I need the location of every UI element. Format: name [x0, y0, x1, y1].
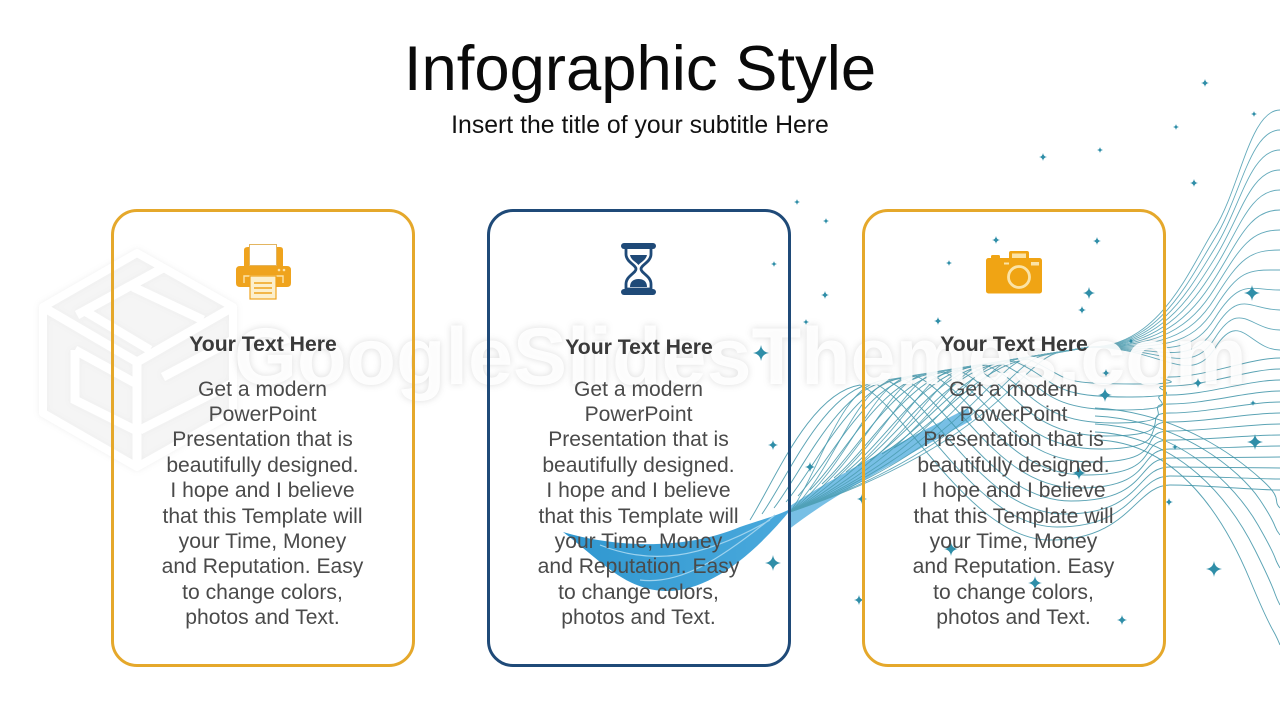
text block: right card: [913, 378, 1114, 629]
text block: right card: Get a modern: [949, 378, 1078, 400]
wave lines: ridge and upper right fan: [790, 110, 1280, 512]
text block: left card: PowerPoint: [209, 403, 316, 426]
icon: camera: [986, 251, 1042, 294]
wave lines: lower right fan: [1095, 408, 1280, 645]
text block: right card: PowerPoint: [960, 403, 1067, 426]
text block: left card: Get a modern: [198, 378, 327, 400]
heading: middle card: Your Text Here: [565, 336, 713, 359]
text block: left card: that this Template will: [162, 505, 363, 528]
text block: right card: that this Template will: [913, 505, 1114, 528]
heading: right card: Your Text Here: [940, 333, 1088, 356]
text block: middle card: Get a modern: [574, 378, 703, 400]
text block: left card: beautifully designed.: [166, 454, 359, 477]
star field: [753, 79, 1263, 625]
text block: middle card: Presentation that is: [548, 428, 729, 451]
text block: middle card: and Reputation. Easy: [538, 555, 739, 578]
text block: middle card: I hope and I believe: [546, 479, 731, 502]
text block: middle card: photos and Text.: [561, 606, 716, 629]
panel: left card: [111, 209, 415, 667]
text block: middle card: that this Template will: [538, 505, 739, 528]
text block: right card: beautifully designed.: [917, 454, 1110, 477]
text block: left card: photos and Text.: [185, 606, 340, 629]
text block: middle card: to change colors,: [558, 581, 719, 604]
text block: middle card: PowerPoint: [585, 403, 692, 426]
text block: left card: I hope and I believe: [170, 479, 355, 502]
text block: left card: [162, 378, 364, 629]
subtitle: Insert the title of your subtitle Here: [451, 112, 829, 139]
text block: right card: your Time, Money: [930, 530, 1097, 553]
title: Infographic Style: [404, 34, 876, 104]
text block: left card: to change colors,: [182, 581, 343, 604]
text block: left card: Presentation that is: [172, 428, 353, 451]
icon: printer: [236, 244, 291, 300]
text block: middle card: beautifully designed.: [542, 454, 735, 477]
text block: right card: I hope and I believe: [921, 479, 1106, 502]
blue ribbon: [563, 408, 972, 591]
text block: left card: your Time, Money: [179, 530, 346, 553]
text block: right card: to change colors,: [933, 581, 1094, 604]
watermark logo: cube: [47, 258, 229, 460]
text block: right card: and Reputation. Easy: [913, 555, 1114, 578]
watermark text: GoogleSlidesThemes.com: [234, 312, 1247, 402]
wave lines: hump and valley: [750, 358, 1280, 540]
text block: right card: photos and Text.: [936, 606, 1091, 629]
text block: left card: and Reputation. Easy: [162, 555, 363, 578]
heading: left card: Your Text Here: [189, 333, 337, 356]
icon: hourglass: [621, 243, 656, 295]
text block: middle card: [538, 378, 740, 629]
panel: right card: [862, 209, 1166, 667]
panel: middle card: [487, 209, 791, 667]
text block: middle card: your Time, Money: [555, 530, 722, 553]
text block: right card: Presentation that is: [923, 428, 1104, 451]
